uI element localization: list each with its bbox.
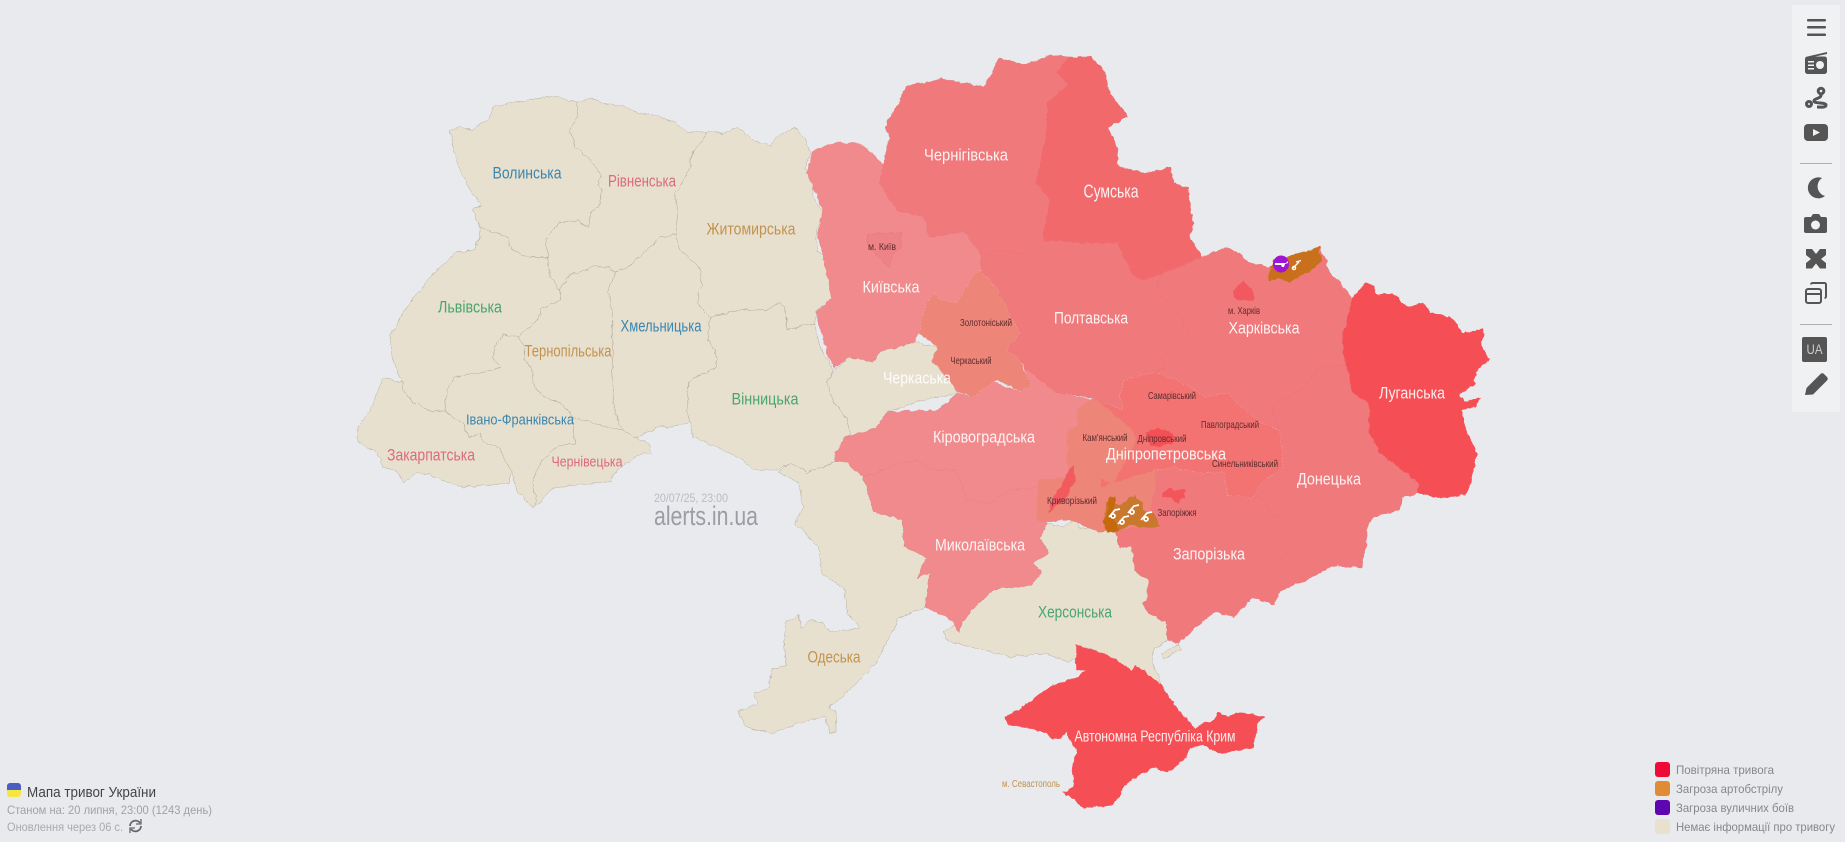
label: Cherkasy: Черкаська: [883, 368, 951, 387]
region: Rivne: [545, 98, 707, 290]
region: Dnipropetrovsk: [1037, 372, 1283, 532]
region: Chernivtsi: [532, 417, 652, 507]
city: Zaporizhzhia: [1163, 488, 1186, 503]
label: Kamianske raion: Кам'янський: [1082, 432, 1128, 444]
icon: fullscreen: [1806, 249, 1826, 268]
icon: menu: [1807, 19, 1826, 36]
icon: camera: [1804, 214, 1827, 233]
region: Zhytomyr: [675, 127, 833, 330]
region: Cherkasy raions: [919, 270, 1032, 397]
label: Kyiv city: м. Київ: [868, 241, 896, 253]
icon: flag: [7, 783, 21, 797]
legend: [1655, 762, 1835, 834]
label: Zaporizhzhia city: Запоріжжя: [1158, 507, 1196, 519]
raion: Kamianskyi: [1067, 398, 1136, 483]
alert oblasts: [807, 55, 1489, 808]
label: Sevastopol: м. Севастополь: [1002, 778, 1060, 790]
label: Synelnykove raion: Синельниківський: [1212, 458, 1278, 470]
watermark: [654, 491, 759, 531]
label: Zhytomyr: Житомирська: [706, 219, 796, 238]
panel: status: [7, 783, 212, 834]
region: Ternopil: [518, 267, 623, 430]
label: Volyn: Волинська: [492, 163, 562, 182]
label: Samar raion: Самарівський: [1148, 390, 1196, 402]
legend item: air alert: Повітряна тривога: [1676, 763, 1774, 777]
region: Kyiv oblast: [807, 143, 981, 368]
label: Rivne: Рівненська: [608, 171, 676, 190]
label: Kyiv oblast: Київська: [862, 277, 920, 296]
label: Donetsk: Донецька: [1297, 469, 1361, 488]
label: Zakarpattia: Закарпатська: [387, 445, 475, 464]
label: Kherson: Херсонська: [1038, 602, 1112, 621]
icon: artillery Nikopol 2: [1118, 516, 1129, 524]
region: Poltava: [981, 240, 1190, 410]
legend item: street fighting: Загроза вуличних боїв: [1676, 801, 1794, 815]
legend item: artillery: Загроза артобстрілу: [1676, 782, 1783, 796]
icon: video: [1804, 124, 1828, 141]
icon: windows: [1806, 283, 1826, 303]
region: Cherkasy (land part): [827, 342, 958, 437]
label: Ternopil: Тернопільська: [524, 341, 612, 360]
update countdown: Оновлення через 06 с.: [7, 820, 123, 834]
region: Mykolaiv: [863, 460, 1049, 632]
raion: Nikopol: [1100, 470, 1160, 532]
region: Arabat spit: [1161, 644, 1181, 659]
icon: route: [1806, 88, 1826, 107]
region: Volyn: [450, 95, 603, 257]
icon: artillery Nikopol 3: [1128, 505, 1139, 514]
region: Kherson: [943, 520, 1168, 685]
region: Luhansk: [1342, 283, 1489, 498]
region: Odesa: [738, 462, 930, 733]
artillery zone: Nikopol: [1104, 496, 1161, 533]
label: Kharkiv: Харківська: [1228, 318, 1300, 337]
label: Poltava: Полтавська: [1054, 308, 1128, 327]
icon: pencil: [1805, 373, 1828, 395]
panel: toolbar: [1792, 5, 1840, 412]
icon: radio: [1805, 52, 1827, 74]
divider: [1800, 163, 1832, 164]
watermark site: alerts.in.ua: [654, 501, 759, 531]
label: Zaporizhzhia: Запорізька: [1173, 544, 1245, 563]
button: language: [1802, 337, 1827, 362]
label: Chernivtsi: Чернівецька: [552, 453, 623, 470]
region: Donetsk: [1253, 365, 1418, 580]
label: Luhansk: Луганська: [1379, 383, 1445, 402]
city: Kyiv: [866, 232, 901, 268]
label: Mykolaiv: Миколаївська: [935, 535, 1025, 554]
button: language: UA: [1806, 341, 1823, 357]
region: Vinnytsia: [687, 302, 850, 472]
region: Zaporizhzhia: [1115, 468, 1306, 643]
city: Dnipro: [1147, 428, 1175, 448]
title: Мапа тривог України: [27, 785, 156, 801]
region: Sumy: [1036, 57, 1202, 280]
region: Lviv: [389, 227, 560, 412]
icon: refresh: [130, 819, 141, 833]
label: Kryvyi Rih raion: Криворізький: [1047, 495, 1097, 507]
label: Cherkasy raion: Черкаський: [950, 355, 992, 367]
region: Khmelnytskyi: [608, 235, 717, 438]
region: Kharkiv: [1155, 247, 1353, 430]
label: Dnipro raion: Дніпровський: [1138, 433, 1187, 445]
label: Ivano-Frankivsk: Івано-Франківська: [466, 411, 575, 428]
label: Pavlohrad raion: Павлоградський: [1201, 419, 1259, 431]
city: Kharkiv: [1234, 280, 1254, 300]
divider: [1800, 324, 1832, 325]
label: Sumy: Сумська: [1084, 180, 1139, 201]
artillery zone: Nikopol west: [1104, 497, 1118, 533]
label: Kirovohrad: Кіровоградська: [933, 427, 1035, 446]
label: Chernihiv: Чернігівська: [924, 145, 1008, 164]
map of Ukraine: [358, 55, 1489, 808]
label: Khmelnytskyi: Хмельницька: [620, 316, 702, 335]
icon: moon: [1808, 177, 1825, 198]
region: Chernihiv: [880, 55, 1069, 255]
icon: artillery Kharkiv: [1292, 260, 1301, 270]
icon: street fighting marker: [1273, 256, 1289, 272]
legend item: no info: Немає інформації про тривогу: [1676, 820, 1835, 834]
artillery zone: Kharkiv border: [1268, 247, 1323, 282]
label: Odesa: Одеська: [808, 647, 861, 666]
status date: Станом на: 20 липня, 23:00 (1243 день): [7, 803, 212, 817]
no-information oblasts: [358, 95, 1181, 733]
region: Ivano-Frankivsk: [446, 335, 575, 507]
labels: [387, 145, 1445, 790]
region: Crimea: [1005, 645, 1265, 808]
raion: Kryvyi Rih: [1037, 457, 1102, 532]
label: Vinnytsia: Вінницька: [732, 389, 799, 408]
icon: artillery Nikopol 4: [1141, 512, 1152, 521]
oblast shapes: [358, 55, 1489, 808]
label: Crimea: Автономна Республіка Крим: [1074, 728, 1236, 745]
region: Zakarpattia: [358, 378, 512, 487]
watermark date: 20/07/25, 23:00: [654, 491, 728, 505]
label: Zolotonosky raion: Золотоніський: [960, 317, 1012, 329]
city: Kryvyi Rih: [1048, 465, 1075, 512]
label: Dnipropetrovsk: Дніпропетровська: [1106, 444, 1226, 463]
label: Lviv: Львівська: [438, 297, 502, 316]
label: Kharkiv city: м. Харків: [1228, 305, 1260, 317]
icon: artillery Nikopol 1: [1109, 509, 1120, 518]
region: Kirovohrad: [835, 368, 1094, 503]
